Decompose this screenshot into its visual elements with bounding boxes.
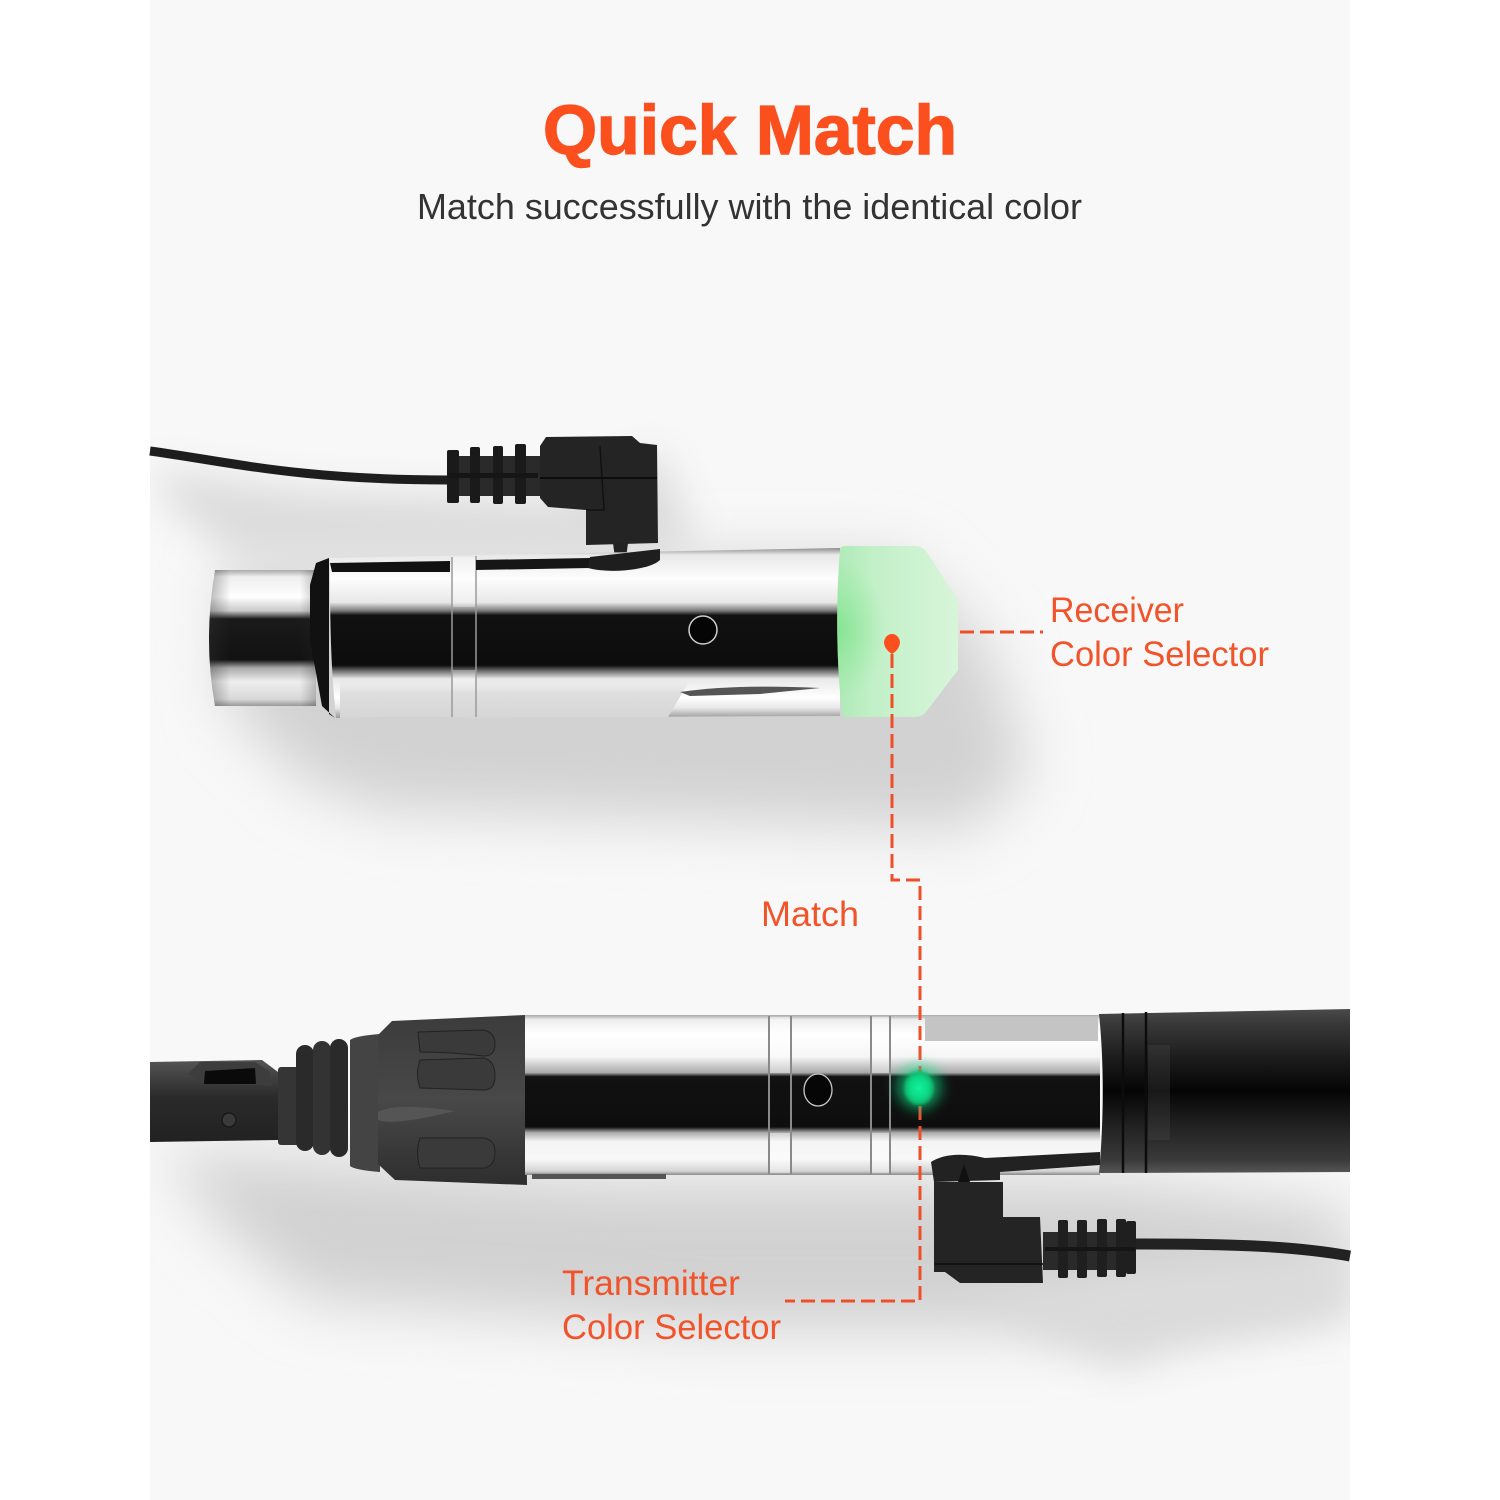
- transmitter label: Color Selector: [562, 1308, 781, 1347]
- transmitter plug: [150, 1060, 278, 1142]
- subtitle: Match successfully with the identical color: [417, 186, 1082, 227]
- transmitter black sleeve: [1099, 1009, 1350, 1173]
- receiver strain relief: [447, 444, 542, 504]
- receiver device: [150, 436, 958, 718]
- receiver hole: [689, 616, 717, 644]
- LED glow: [896, 1064, 942, 1110]
- receiver o-ring: [310, 558, 335, 718]
- drop shadows: [150, 450, 1350, 1370]
- transmitter label: Transmitter: [562, 1264, 740, 1303]
- transmitter collar: [278, 1067, 299, 1145]
- transmitter angled connector: [934, 1182, 1043, 1283]
- transmitter cable: [1136, 1244, 1350, 1256]
- LED dot: [904, 1071, 934, 1105]
- receiver callout: Color Selector: [1050, 635, 1269, 674]
- transmitter hole: [804, 1074, 832, 1106]
- receiver connector pin: [613, 543, 628, 562]
- title: Quick Match: [543, 91, 957, 169]
- receiver label: Receiver: [1050, 591, 1184, 630]
- receiver callout: [960, 591, 1269, 674]
- transmitter slot: [931, 1152, 1100, 1182]
- receiver body details: [452, 557, 476, 607]
- match connector line: [785, 654, 920, 1301]
- receiver color selector cap: [837, 546, 958, 717]
- match callout: [761, 634, 920, 1301]
- match dot: [884, 634, 900, 654]
- transmitter body grooves: [769, 1016, 890, 1174]
- transmitter chrome body: [525, 1015, 1100, 1175]
- transmitter rubber ribs: [296, 1039, 348, 1157]
- match label: Match: [761, 895, 859, 934]
- receiver chrome body: [330, 548, 840, 718]
- transmitter label: [562, 1264, 781, 1347]
- transmitter strain relief: [1043, 1219, 1136, 1278]
- receiver leader line: [960, 630, 1043, 634]
- transmitter LED: [896, 1064, 942, 1110]
- receiver front cap: [209, 570, 316, 706]
- transmitter device: [150, 1009, 1350, 1283]
- transmitter connector pin: [958, 1164, 970, 1182]
- transmitter upper highlight band: [925, 1017, 1098, 1041]
- transmitter knurled nut: [378, 1015, 527, 1185]
- receiver cable: [150, 451, 448, 480]
- transmitter neck: [350, 1034, 380, 1172]
- background panel: [150, 0, 1350, 1500]
- receiver angled connector: [540, 436, 658, 545]
